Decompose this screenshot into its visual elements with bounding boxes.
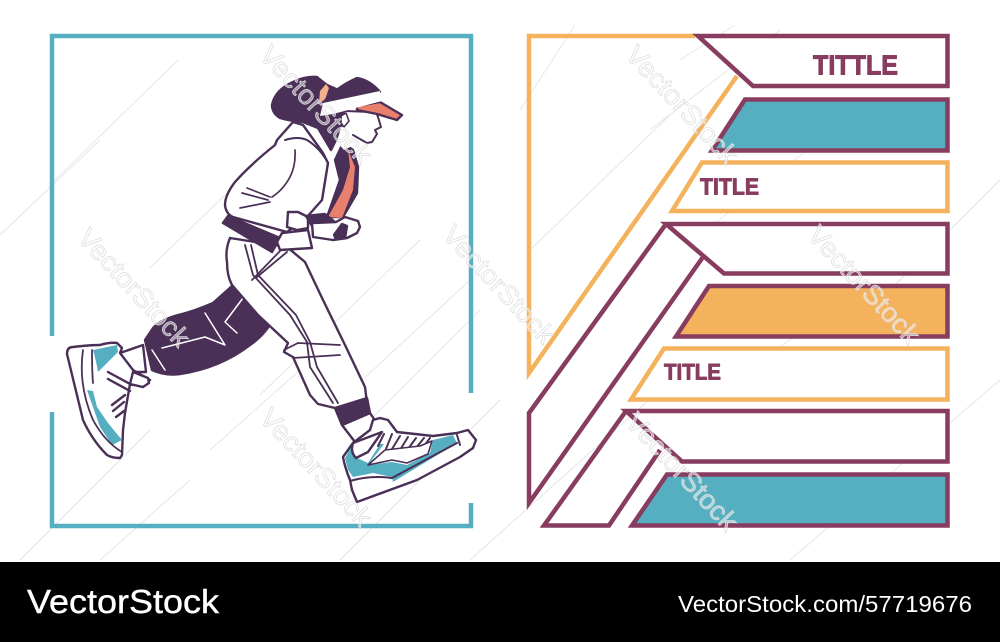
bar 4: plum outline with band [529, 224, 948, 503]
hair [272, 77, 350, 150]
watermarks [72, 40, 926, 537]
heading: title: TITLE [664, 360, 721, 384]
watermarks: VectorStock [254, 40, 378, 170]
bar 5: orange [676, 286, 948, 336]
watermarks: VectorStock [72, 223, 196, 353]
bar 2: teal [712, 100, 948, 150]
front leg [226, 238, 378, 442]
footer bar [0, 562, 1000, 642]
watermarks: VectorStock [802, 220, 926, 350]
waistband [223, 216, 280, 252]
teal frame [52, 36, 471, 526]
bar 8: teal [632, 474, 948, 526]
heading: title: TITLE [700, 174, 759, 200]
footer brand: VectorStock [27, 583, 220, 620]
footer url: VectorStock.com/57719676 [678, 591, 972, 617]
runner illustration [67, 77, 476, 502]
watermarks: VectorStock [620, 407, 744, 537]
heading: tittle: TITTLE [813, 50, 898, 80]
watermarks: VectorStock [620, 40, 744, 170]
bar 7: plum outline with band [544, 411, 948, 526]
watermarks: VectorStock [254, 403, 378, 533]
front shoe [343, 418, 476, 502]
rear shoe [67, 343, 150, 458]
jacket [225, 122, 328, 250]
fist and forearm [306, 214, 360, 240]
face [345, 108, 381, 143]
bar 3: orange outline [672, 162, 948, 211]
bar 6: orange outline [631, 348, 948, 400]
scrunchie [319, 84, 329, 103]
face outline [345, 111, 381, 143]
panel 1: large orange shape [529, 36, 737, 373]
watermarks: VectorStock [437, 220, 561, 350]
bar 1: tittle [698, 36, 948, 86]
neck [337, 127, 358, 150]
shirt [327, 143, 358, 218]
ear [341, 113, 349, 127]
visor cap [320, 78, 402, 120]
rear leg [120, 286, 274, 374]
